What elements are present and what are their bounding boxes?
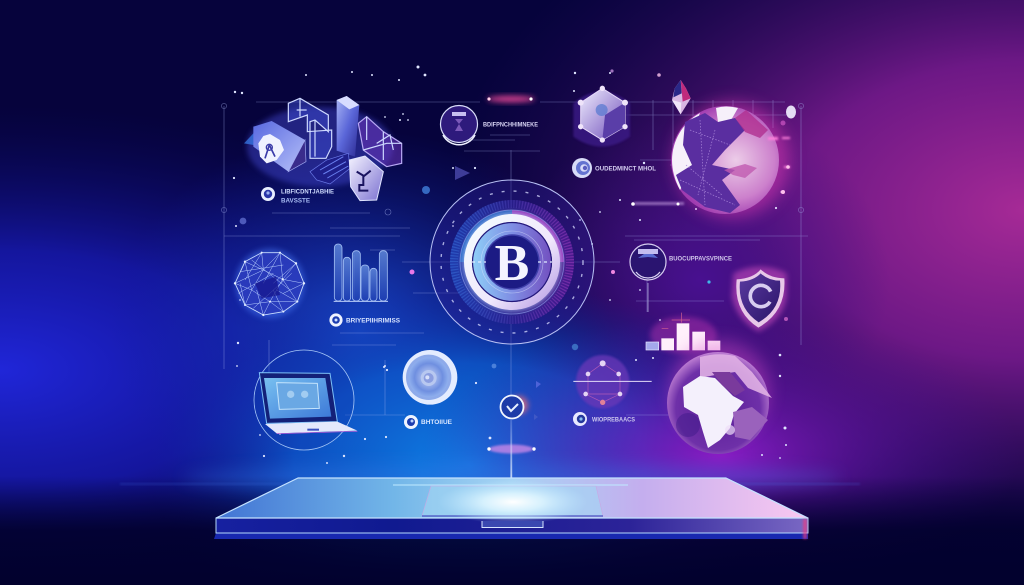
crosshair ticks (472, 261, 552, 263)
label: right centre badge: BUOCUPPAVSVPINCE (669, 256, 732, 262)
label: network (573, 412, 636, 426)
lower glow marker (487, 444, 536, 454)
icon: check badge (500, 396, 528, 418)
wireframe boxes (288, 98, 402, 167)
frame and grid lines (221, 100, 808, 490)
icon: upper globe (671, 102, 796, 218)
icon and label: top centre badge (440, 106, 538, 145)
light streak (631, 202, 684, 206)
emblem outer ring (430, 180, 594, 344)
emblem core (472, 222, 552, 302)
tower (310, 96, 359, 184)
emblem letter: B (495, 235, 529, 292)
light beam (510, 420, 512, 495)
icon: lower globe (667, 340, 772, 454)
top surface (216, 478, 808, 518)
icon: round dial (403, 350, 457, 405)
label: right centre badge (630, 244, 732, 312)
pink streak (487, 96, 535, 102)
label: top right (572, 158, 656, 178)
left gear panel (244, 121, 306, 172)
icon: shield (732, 267, 787, 332)
base shadow edge (214, 533, 808, 539)
emblem white ring glow (466, 216, 558, 308)
shield block (349, 156, 383, 201)
hologram projector laptop base (182, 420, 842, 539)
icon: laptop in circle (254, 350, 357, 450)
emblem white ring (468, 218, 556, 306)
pink corner accent (803, 519, 807, 539)
glowing bar icon (646, 313, 720, 353)
front notch (482, 521, 543, 528)
icon: hexagon crystal (573, 86, 630, 147)
text label: top left: BAVSSTE (281, 198, 311, 204)
scattered particles (233, 66, 788, 464)
icon: network diamond (573, 355, 652, 408)
text label: top left: LIBFICDNTJABHIE (281, 188, 335, 196)
icon and label: top centre badge: BDIFPNCHHIMNEKE (483, 122, 538, 128)
label: chart (329, 313, 401, 327)
base glow (182, 464, 842, 492)
icon: isometric infrastructure cluster (244, 96, 402, 201)
trackpad (422, 486, 603, 516)
icon: mesh sphere (234, 248, 305, 318)
bar chart (334, 244, 388, 301)
icon: crystal gem (672, 80, 691, 114)
label: chart: BRIYEPIIHRIMISS (346, 318, 401, 324)
central emblem (430, 180, 594, 344)
label: network: WIOPREBAACS (592, 416, 636, 424)
front face (216, 518, 808, 533)
central flash (438, 480, 588, 524)
label: top right: OUDEDMINCT MHOL (595, 166, 656, 172)
label: dial: BHTOIIUE (421, 419, 453, 426)
text label: top left (261, 187, 335, 204)
label: dial (404, 415, 453, 429)
